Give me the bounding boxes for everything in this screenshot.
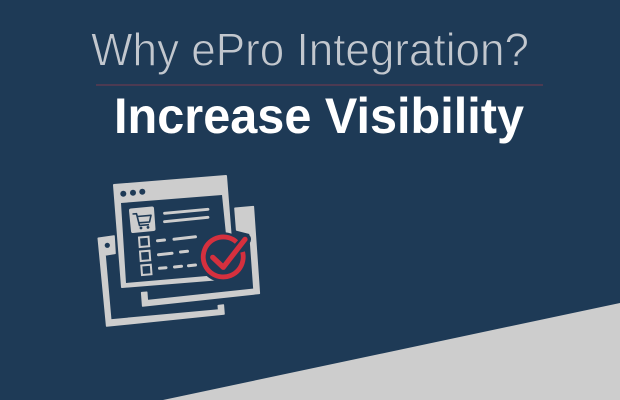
window dots	[120, 189, 145, 197]
icon: browser windows with cart and checkmark	[98, 176, 259, 326]
back window left	[98, 236, 224, 326]
heading lines	[164, 209, 208, 222]
cart tile	[131, 208, 154, 231]
checkboxes	[139, 237, 152, 275]
subtitle: Increase Visibility	[114, 87, 524, 144]
title: Why ePro Integration?	[91, 24, 529, 76]
main window	[114, 176, 234, 287]
checkmark badge	[198, 232, 248, 282]
grey diagonal corner	[163, 303, 620, 400]
middle window	[142, 207, 259, 306]
list dashes	[158, 237, 196, 268]
back window left dot	[105, 243, 110, 248]
